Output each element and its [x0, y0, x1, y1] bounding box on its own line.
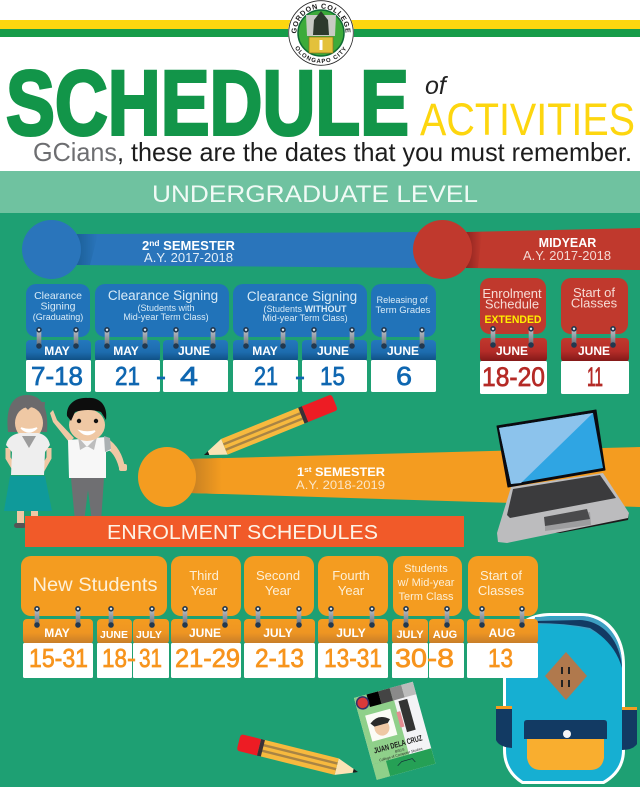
icon: Gordon College seal: GORDON COLLEGE [292, 4, 350, 34]
illustration: laptop [497, 410, 629, 543]
icon: Gordon College seal: OLONGAPO CITY [296, 46, 346, 64]
calendar: third year [171, 556, 241, 678]
calendar: clearance signing with mid-year term class: (Students with [137, 303, 195, 313]
calendar: students with mid-year term class: AUG [433, 629, 457, 641]
calendar: new students: New Students [32, 575, 158, 596]
calendar: start of classes: AUG [489, 626, 515, 640]
calendar: enrolment schedule extended: 18-20 [482, 362, 545, 392]
illustration: pencil bottom [237, 734, 360, 780]
calendar: clearance signing with mid-year term class: 4 [180, 361, 198, 391]
calendar: new students: JULY [136, 629, 162, 641]
calendar: second year: Year [265, 583, 292, 598]
calendar: clearance signing with mid-year term class: Mid-year Term Class) [123, 312, 209, 322]
calendar: students with mid-year term class: -8 [427, 643, 454, 673]
calendar: midyear start of classes: Classes [571, 296, 618, 310]
calendar: enrolment schedule extended [480, 278, 547, 394]
calendar: clearance signing with mid-year term class: MAY [113, 344, 139, 358]
calendar: clearance signing without mid-year term class: (Students WITHOUT [263, 304, 347, 314]
calendar: students with mid-year term class: Students [404, 563, 448, 575]
illustration: girl student [4, 395, 52, 528]
leather patch [545, 652, 587, 700]
banner: 2nd semester: 2 [142, 239, 149, 253]
illustration: boy student [50, 398, 127, 528]
banner: 2nd semester [22, 220, 420, 279]
calendar: clearance signing with mid-year term class: - [156, 361, 166, 391]
calendar: releasing of term grades: JUNE [387, 344, 419, 358]
icon: Gordon College seal [288, 0, 354, 66]
calendar: fourth year: Fourth [332, 568, 370, 583]
calendar: clearance signing graduating: (Graduating) [33, 312, 83, 322]
calendar: releasing of term grades: 6 [396, 361, 412, 391]
calendar: second year: JULY [263, 626, 293, 640]
title: SCHEDULE: SCHEDULE [6, 52, 409, 154]
calendar: clearance signing without mid-year term class: 21 [254, 361, 278, 391]
header stripes [0, 20, 640, 37]
calendar: new students: - [127, 643, 136, 673]
calendar: second year: Second [256, 568, 300, 583]
calendar: students with mid-year term class: w/ Mid-year [397, 577, 455, 589]
calendar: clearance signing without mid-year term class: Mid-year Term Class) [262, 313, 348, 323]
calendar: clearance signing graduating [26, 284, 91, 392]
calendar: third year: Third [189, 568, 219, 583]
calendar: students with mid-year term class: JULY [396, 629, 424, 641]
pocket [524, 720, 607, 770]
heading band: enrolment schedules [25, 516, 464, 547]
calendar: clearance signing without mid-year term class [233, 284, 367, 392]
banner: 1st semester [138, 447, 640, 507]
calendar: fourth year: JULY [336, 626, 366, 640]
tagline: GCians, these are the dates that you must remember. [33, 137, 632, 167]
calendar: fourth year: 13-31 [324, 643, 382, 673]
calendar: enrolment schedule extended: JUNE [496, 344, 528, 358]
calendar: enrolment schedule extended: Schedule [485, 296, 539, 312]
left strap [496, 706, 512, 748]
calendar: clearance signing without mid-year term class: - [295, 361, 305, 391]
calendar: new students: MAY [44, 626, 70, 640]
calendar: clearance signing graduating: MAY [44, 344, 70, 358]
calendar: second year: 2-13 [255, 643, 304, 673]
calendar: new students [21, 556, 169, 678]
calendar: new students: 31 [139, 643, 162, 673]
calendar: releasing of term grades: Releasing of [376, 295, 428, 305]
calendar: new students: 18 [102, 643, 127, 673]
illustration: ID card: BSCS [395, 747, 406, 754]
calendar: clearance signing without mid-year term class: 15 [320, 361, 345, 391]
banner: midyear: MIDYEAR [539, 236, 596, 250]
banner: 2nd semester: nd [149, 239, 160, 248]
banner: 1st semester: st [304, 465, 312, 474]
calendar: midyear start of classes [561, 278, 629, 394]
calendar: third year: Year [191, 583, 218, 598]
calendar: fourth year [318, 556, 388, 678]
calendar: clearance signing graduating: 7-18 [31, 361, 83, 391]
calendar: start of classes: Start of [480, 568, 522, 583]
calendar: start of classes: Classes [478, 583, 525, 598]
heading band: undergraduate level [0, 171, 640, 213]
calendar: start of classes: 13 [488, 643, 513, 673]
calendar: students with mid-year term class: Term Class [398, 591, 454, 603]
calendar: clearance signing graduating: Signing [40, 300, 76, 312]
calendar: new students: JUNE [100, 629, 128, 641]
calendar: clearance signing with mid-year term class [95, 284, 229, 392]
calendar: students with mid-year term class [392, 556, 464, 678]
calendar: clearance signing without mid-year term class: JUNE [317, 344, 349, 358]
illustration: backpack [496, 613, 637, 784]
banner: 1st semester: SEMESTER [311, 467, 386, 479]
calendar: enrolment schedule extended: Enrolment [482, 286, 542, 301]
calendar: third year: 21-29 [175, 643, 240, 673]
calendar: clearance signing without mid-year term class: Clearance Signing [247, 289, 357, 304]
calendar: students with mid-year term class: 30 [395, 643, 427, 673]
heading band: enrolment schedules: ENROLMENT SCHEDULES [107, 521, 378, 544]
calendar: second year [244, 556, 315, 678]
title: of: of [425, 72, 449, 100]
banner: 2nd semester: SEMESTER [159, 239, 235, 253]
calendar: midyear start of classes: Start of [573, 285, 615, 300]
banner: midyear [413, 220, 640, 279]
illustration: ID card: JUAN DELA CRUZ [373, 733, 423, 755]
banner: 1st semester: 1 [297, 467, 303, 479]
illustration: ID card: College of Computer Studies [379, 747, 423, 762]
calendar: midyear start of classes: 11 [587, 362, 603, 392]
calendar: start of classes [467, 556, 538, 678]
calendar: midyear start of classes: JUNE [578, 344, 610, 358]
calendar: clearance signing with mid-year term class: Clearance Signing [108, 288, 218, 303]
calendar: releasing of term grades [371, 284, 436, 392]
calendar: clearance signing with mid-year term class: 21 [115, 361, 140, 391]
calendar: new students: 15-31 [29, 643, 88, 673]
illustration: ID card [354, 682, 435, 780]
calendar: releasing of term grades: Term Grades [376, 305, 431, 316]
page background [0, 213, 640, 787]
calendar: enrolment schedule extended: EXTENDED [484, 314, 542, 326]
calendar: fourth year: Year [338, 583, 365, 598]
calendar: clearance signing without mid-year term class: MAY [252, 344, 278, 358]
right strap [622, 707, 637, 750]
banner: 1st semester: A.Y. 2018-2019 [296, 480, 385, 492]
illustration: pencil top [201, 394, 338, 463]
calendar: third year: JUNE [189, 626, 221, 640]
calendar: clearance signing with mid-year term class: JUNE [178, 344, 210, 358]
calendar: clearance signing graduating: Clearance [34, 290, 82, 302]
heading band: undergraduate level: UNDERGRADUATE LEVEL [152, 181, 478, 208]
banner: midyear: A.Y. 2017-2018 [523, 249, 611, 263]
banner: 2nd semester: A.Y. 2017-2018 [144, 251, 233, 265]
